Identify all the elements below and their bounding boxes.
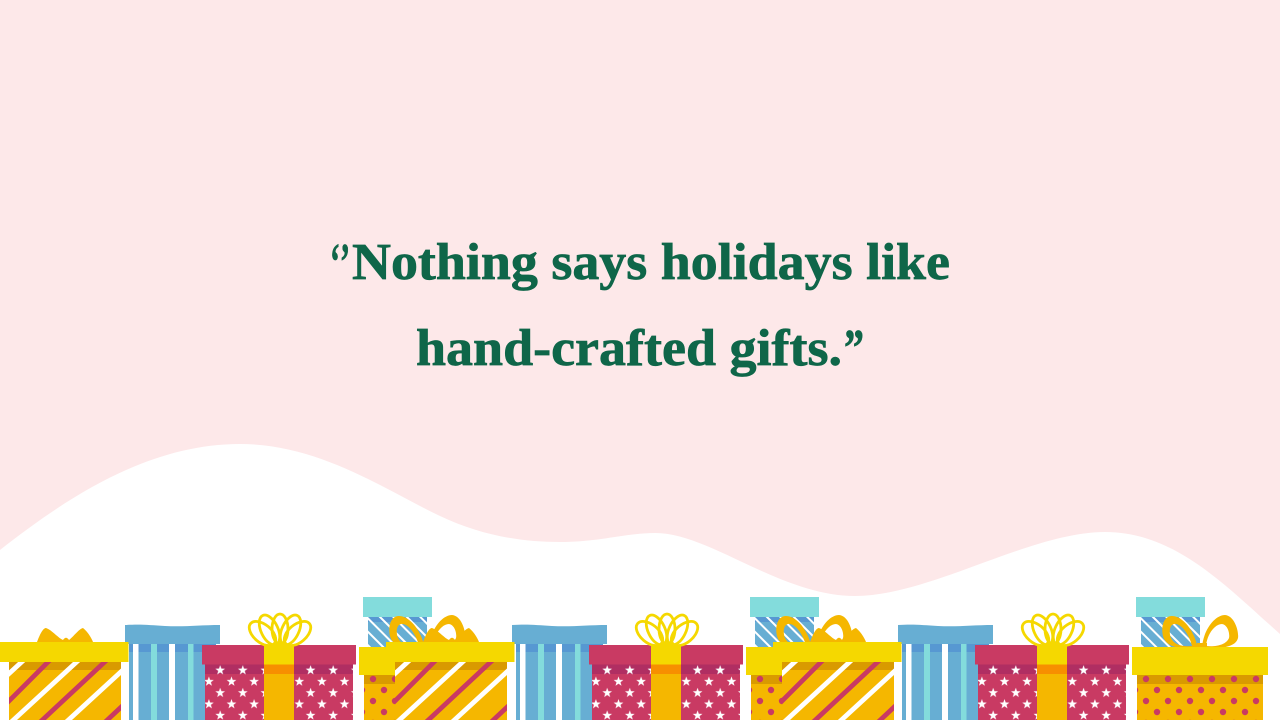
row of gift boxes [0, 597, 1268, 720]
gift: yellow striped 1 [0, 628, 137, 720]
gift: yellow striped 2 [386, 628, 523, 720]
gift: blue striped 1 [125, 625, 220, 720]
gift: red stars 2 [589, 612, 743, 720]
gift: blue striped 2 [512, 625, 607, 720]
quote heading [330, 234, 950, 377]
white wavy hill [0, 444, 1280, 720]
quote heading: ” [844, 320, 864, 377]
gift: teal and polka stack 2 [746, 597, 882, 720]
gift: red stars 3 [975, 612, 1129, 720]
gift: teal and polka stack 3 [1132, 597, 1268, 720]
gift: red stars 1 [202, 612, 356, 720]
quote heading: ‘’ [330, 234, 350, 291]
quote heading: hand-crafted gifts. [416, 320, 842, 377]
gift: yellow striped 3 [773, 628, 910, 720]
gift: blue striped 3 [898, 625, 993, 720]
gift: teal and polka stack 1 [359, 597, 495, 720]
quote heading: Nothing says holidays like [352, 234, 950, 291]
